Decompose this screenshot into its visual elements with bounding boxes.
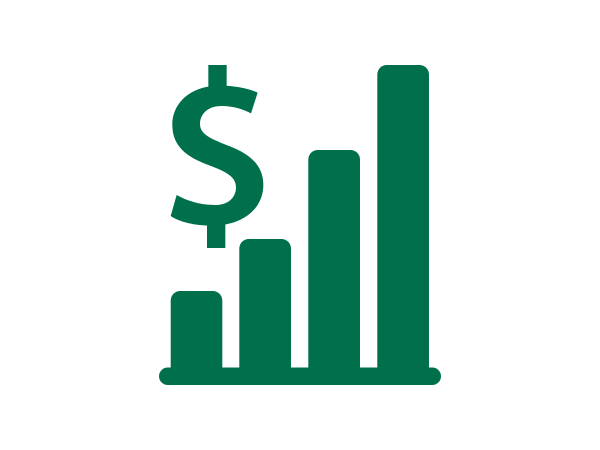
bar 4 [377,65,429,372]
icon: dollar sign [171,65,263,248]
baseline [159,368,441,385]
bar 2 [239,239,291,372]
bar 1 [171,291,222,372]
bar 3 [308,150,360,372]
bar chart: rising bars [159,65,441,385]
